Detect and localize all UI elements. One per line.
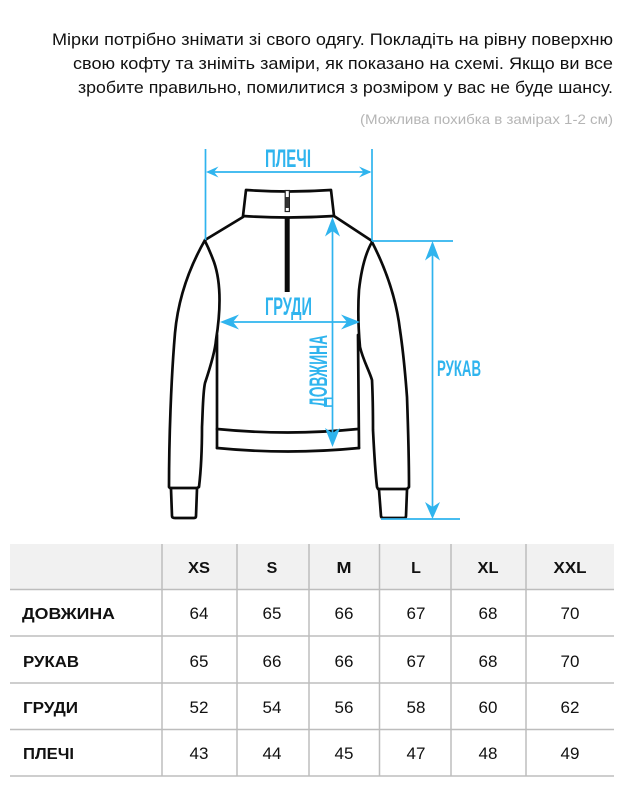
header row: XXL (554, 560, 587, 577)
left cuff (171, 489, 197, 518)
row: length (22, 604, 579, 623)
row: length: 64 (190, 604, 208, 623)
intro text: свою кофту та зніміть заміри, як показано на схемі. Якщо ви все (73, 55, 613, 73)
row: sleeve: 66 (263, 652, 281, 671)
measure: shoulders (206, 145, 372, 241)
header row: L (411, 560, 421, 577)
row: sleeve: 66 (335, 652, 353, 671)
row: sleeve: 65 (190, 652, 208, 671)
row: shoulders: 48 (479, 744, 497, 763)
row: chest (23, 698, 579, 717)
row: length: 68 (479, 604, 497, 623)
jacket outline (169, 190, 409, 518)
row: chest: 62 (561, 698, 579, 717)
measure: length (305, 217, 340, 447)
row: chest: ГРУДИ (23, 700, 78, 717)
table grid (10, 544, 614, 776)
row: chest: 54 (263, 698, 281, 717)
measure: length: ДОВЖИНА (305, 335, 333, 407)
measure: chest: ГРУДИ (265, 293, 312, 321)
right cuff (379, 490, 407, 518)
row: length: 66 (335, 604, 353, 623)
intro text (52, 31, 613, 97)
row: shoulders: 49 (561, 744, 579, 763)
measure: sleeve: РУКАВ (437, 356, 481, 381)
row: sleeve: 68 (479, 652, 497, 671)
row: shoulders: 44 (263, 744, 281, 763)
row: shoulders: ПЛЕЧІ (23, 746, 74, 763)
row: length: ДОВЖИНА (22, 606, 115, 623)
row: shoulders: 45 (335, 744, 353, 763)
row: sleeve: 67 (407, 652, 425, 671)
row: length: 65 (263, 604, 281, 623)
left sleeve (169, 240, 220, 488)
row: chest: 58 (407, 698, 425, 717)
measure: chest (220, 293, 360, 330)
row: chest: 56 (335, 698, 353, 717)
row: shoulders: 43 (190, 744, 208, 763)
size table (10, 544, 614, 776)
note: measurement error: (Можлива похибка в замірах 1-2 см) (360, 111, 613, 127)
row: chest: 52 (190, 698, 208, 717)
header row: XL (478, 560, 499, 577)
measure: shoulders: ПЛЕЧІ (265, 145, 311, 173)
row: sleeve (23, 652, 579, 671)
row: sleeve: РУКАВ (23, 654, 79, 671)
zipper (285, 190, 290, 292)
row: length: 70 (561, 604, 579, 623)
intro text: Мірки потрібно знімати зі свого одягу. Покладіть на рівну поверхню (52, 31, 613, 49)
row: shoulders (23, 744, 579, 763)
row: sleeve: 70 (561, 652, 579, 671)
header row: M (336, 560, 352, 577)
header row (188, 560, 587, 577)
row: chest: 60 (479, 698, 497, 717)
body sides (217, 335, 359, 448)
row: length: 67 (407, 604, 425, 623)
right sleeve (358, 242, 409, 489)
shoulders (205, 216, 372, 241)
hem (217, 429, 359, 452)
collar (243, 190, 334, 218)
row: shoulders: 47 (407, 744, 425, 763)
measure: sleeve (372, 241, 481, 519)
header row: XS (188, 560, 210, 577)
header row: S (267, 560, 278, 577)
intro text: зробите правильно, помилитися з розміром у вас не буде шансу. (78, 79, 613, 97)
table header background (10, 544, 614, 589)
